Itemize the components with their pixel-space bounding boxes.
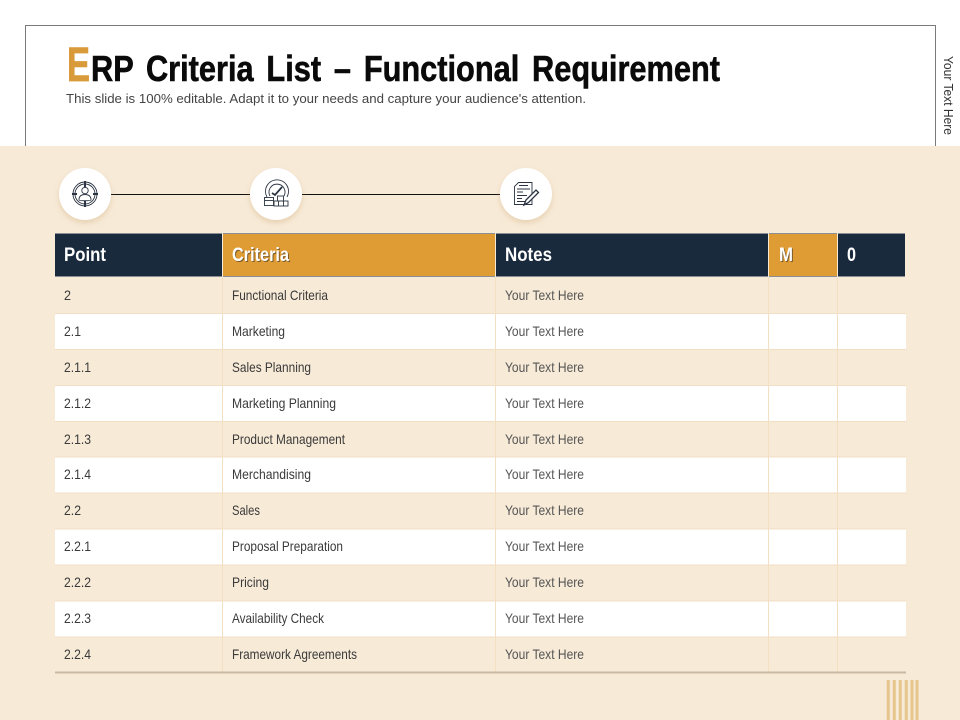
row 2.2.3: Availability Check: [232, 610, 325, 626]
row 2.2.1: Your Text Here: [505, 538, 584, 554]
row 2.2.3: [64, 610, 584, 626]
row 2: 2: [64, 287, 71, 303]
row 2.2.4: 2.2.4: [64, 646, 91, 662]
row 2.2: 2.2: [64, 502, 81, 518]
icon: gauge and boxes: [250, 168, 302, 220]
white row bands: [55, 314, 906, 637]
subtitle: This slide is 100% editable. Adapt it to your needs and capture your audience's attention.: [66, 91, 586, 106]
row 2.1.4: [64, 466, 584, 482]
side label: Your Text Here: [941, 56, 956, 135]
row 2.2.4: Your Text Here: [505, 646, 584, 662]
row 2: Your Text Here: [505, 287, 584, 303]
row 2.1.1: [64, 359, 584, 375]
row 2.1: Your Text Here: [505, 323, 584, 339]
row 2.2.3: 2.2.3: [64, 610, 91, 626]
icon: target person: [59, 168, 111, 220]
row 2.1.2: Marketing Planning: [232, 395, 336, 411]
row 2.2.4: [64, 646, 584, 662]
row 2.2.2: [64, 574, 584, 590]
row 2.1.3: Product Management: [232, 431, 345, 447]
row 2.2.1: 2.2.1: [64, 538, 91, 554]
table header: M: [780, 246, 794, 267]
table header: M: [779, 245, 793, 266]
row 2.1.4: Merchandising: [232, 466, 311, 482]
connector line: [111, 194, 500, 196]
row 2.2.2: Pricing: [232, 574, 269, 590]
table header: [55, 233, 905, 277]
row 2: Functional Criteria: [232, 287, 328, 303]
row 2.1: 2.1: [64, 323, 81, 339]
row 2.1.4: Your Text Here: [505, 466, 584, 482]
title: RP Criteria List – Functional Requirement: [91, 48, 720, 89]
row 2.1.1: 2.1.1: [64, 359, 91, 375]
table header: 0: [847, 245, 856, 266]
table header: Point: [64, 245, 107, 266]
row 2.1: [64, 323, 584, 339]
row 2.1.1: Sales Planning: [232, 359, 311, 375]
row 2.1.1: Your Text Here: [505, 359, 584, 375]
row 2.2: Sales: [232, 502, 260, 518]
row 2: [64, 287, 584, 303]
row 2.1.3: Your Text Here: [505, 431, 584, 447]
background panel: [0, 146, 960, 720]
icon: document and pen: [500, 168, 552, 220]
row 2.2.2: Your Text Here: [505, 574, 584, 590]
row 2.1.2: 2.1.2: [64, 395, 91, 411]
row 2.2.2: 2.2.2: [64, 574, 91, 590]
row 2.2: Your Text Here: [505, 502, 584, 518]
row 2.1.2: [64, 395, 584, 411]
row 2.1.3: 2.1.3: [64, 431, 91, 447]
row 2.2.1: Proposal Preparation: [232, 538, 343, 554]
row 2.1.3: [64, 431, 584, 447]
table header: Criteria: [232, 245, 289, 266]
title: [67, 39, 720, 92]
table header: Criteria: [233, 246, 290, 267]
row 2.1: Marketing: [232, 323, 285, 339]
table: [55, 233, 906, 672]
title frame: [26, 26, 936, 160]
table header: Notes: [505, 245, 552, 266]
row 2.2.4: Framework Agreements: [232, 646, 357, 662]
row 2.1.2: Your Text Here: [505, 395, 584, 411]
row 2.2.1: [64, 538, 584, 554]
row 2.2.3: Your Text Here: [505, 610, 584, 626]
title: E: [67, 39, 90, 92]
row 2.1.4: 2.1.4: [64, 466, 91, 482]
row 2.2: [64, 502, 584, 518]
